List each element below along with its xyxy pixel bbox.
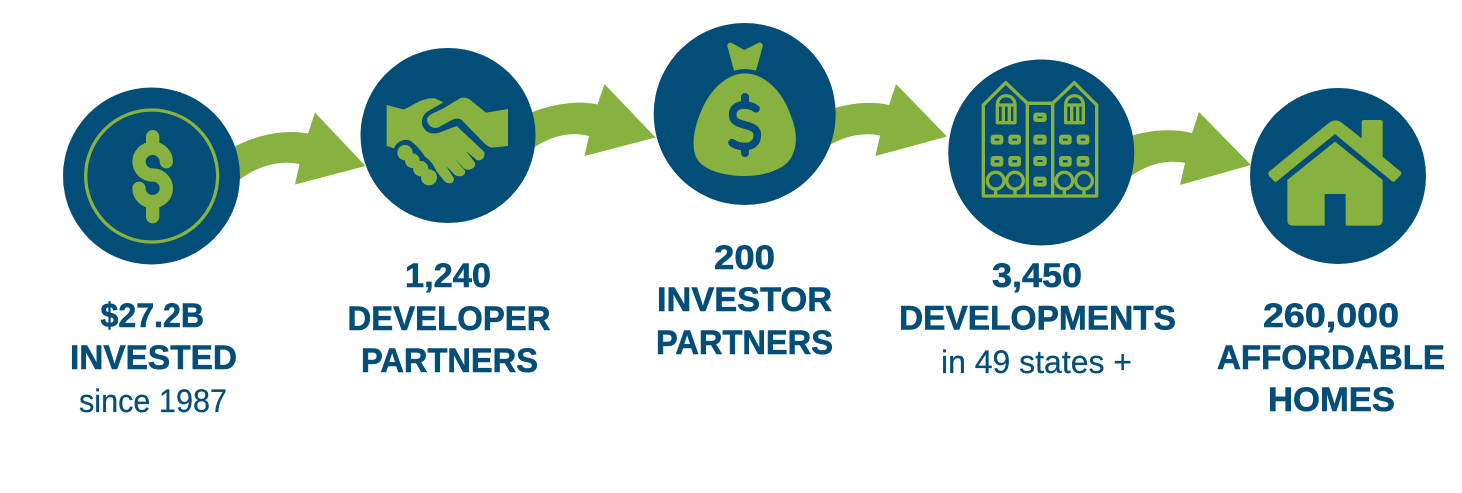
icon: apartment building	[983, 83, 1097, 196]
arrow: step 4 to 5	[1125, 112, 1251, 185]
label: step 5: HOMES	[1268, 381, 1395, 419]
label: step 2: PARTNERS	[361, 342, 538, 380]
label: step 3	[656, 239, 833, 362]
label: step 4: 3,450	[992, 257, 1082, 295]
label: step 1: $27.2B	[100, 297, 204, 335]
label: step 5	[1217, 297, 1445, 419]
icon: house	[1268, 120, 1401, 226]
icon: handshake	[387, 98, 508, 185]
icon: money bag	[694, 43, 796, 176]
arrow: step 1 to 2	[232, 112, 366, 184]
circle: step 5	[1250, 88, 1426, 264]
label: step 1: since 1987	[79, 383, 227, 419]
label: step 2: DEVELOPER	[348, 300, 550, 338]
label: step 4: in 49 states +	[941, 344, 1132, 380]
circle: step 1	[63, 88, 240, 264]
circle: step 3	[654, 23, 836, 205]
label: step 1	[70, 297, 237, 419]
arrow: step 3 to 4	[828, 84, 947, 156]
step 4: developments	[899, 60, 1176, 380]
label: step 3: 200	[714, 239, 775, 277]
label: step 3: PARTNERS	[656, 324, 833, 362]
label: step 2	[348, 257, 550, 380]
circle: step 2	[360, 48, 536, 223]
label: step 4	[899, 257, 1176, 380]
arrow: step 2 to 3	[530, 84, 656, 156]
label: step 2: 1,240	[405, 257, 491, 295]
step 5: affordable homes	[1217, 88, 1445, 419]
step 1: invested	[63, 88, 240, 419]
label: step 3: INVESTOR	[657, 281, 832, 319]
circle: step 4	[948, 60, 1134, 246]
label: step 5: AFFORDABLE	[1217, 339, 1445, 377]
label: step 1: INVESTED	[70, 339, 237, 377]
label: step 4: DEVELOPMENTS	[899, 300, 1176, 338]
step 2: developer partners	[348, 48, 550, 380]
step 3: investor partners	[654, 23, 836, 362]
label: step 5: 260,000	[1263, 297, 1399, 335]
icon: dollar coin	[86, 110, 218, 242]
